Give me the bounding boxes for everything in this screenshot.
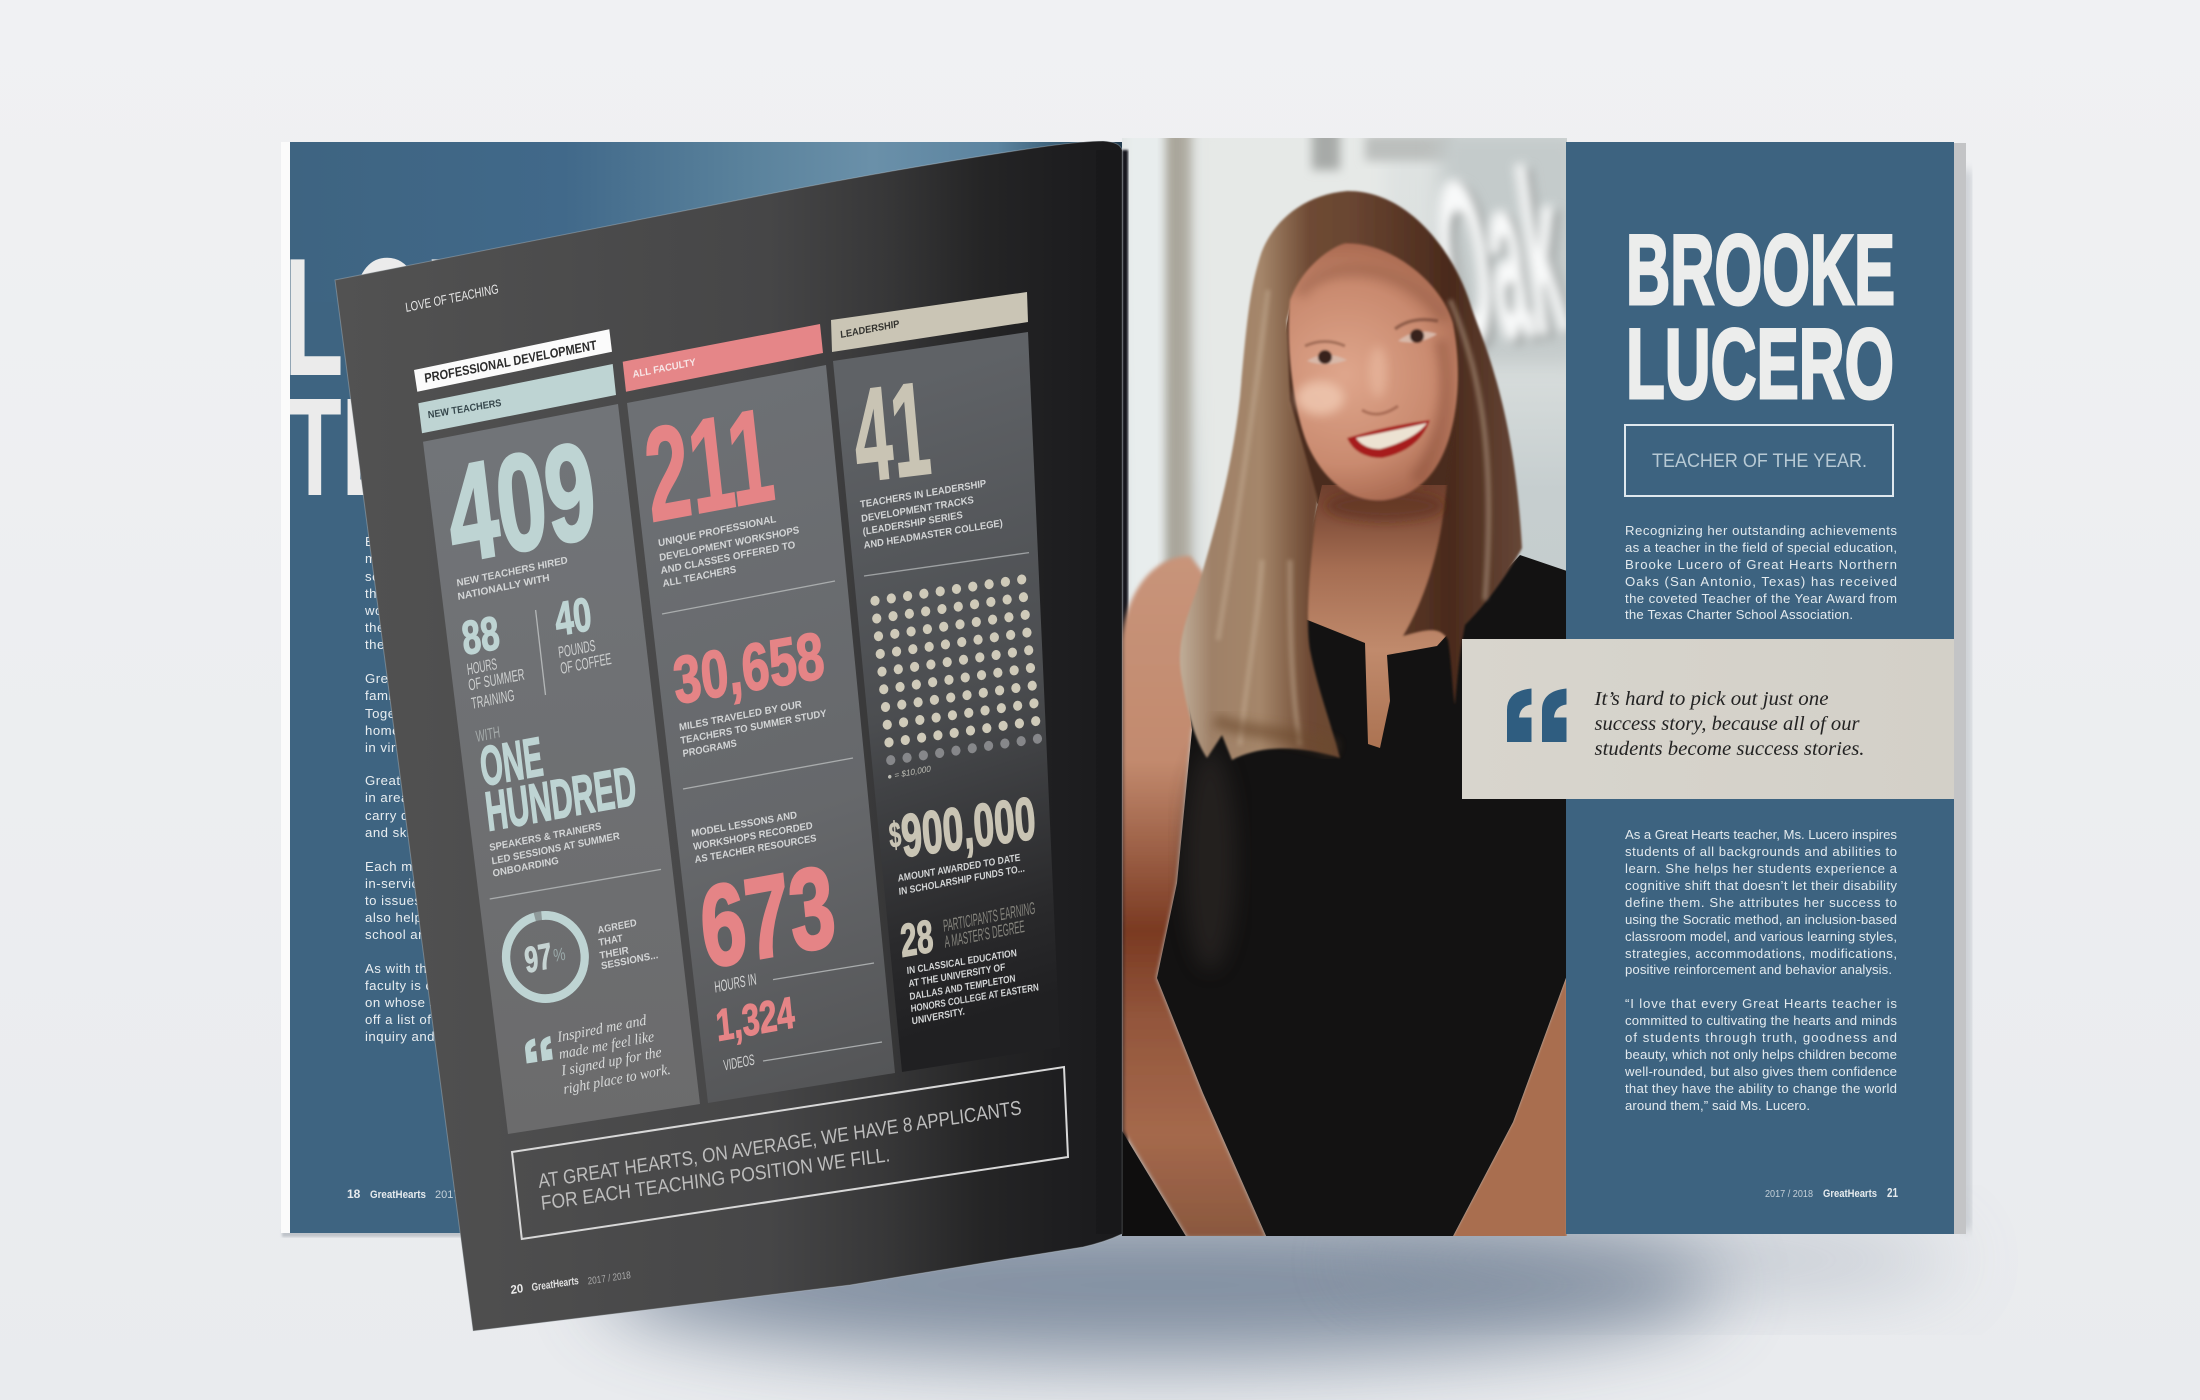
black dress [1157,555,1567,1238]
left page body text: faculty is o [365,978,433,993]
left page footer: 18 [347,1187,361,1201]
callout box: applicants [512,1067,1068,1239]
body paragraph one [1625,827,1898,977]
pull quote text: It’s hard to pick out just one [1593,688,1829,710]
stat: 30,658 miles [670,619,828,760]
stat: $900,000 scholarships: 900,000 [899,784,1038,870]
left page body text: home [365,723,400,738]
left page body text: the [365,620,385,635]
stat: 40 pounds of coffee [552,588,613,678]
stat: $900,000 scholarships: AMOUNT AWARDED TO DATE [897,853,1021,885]
stat: 40 pounds of coffee: OF COFFEE [559,650,613,678]
stat: 1,324 videos [714,988,882,1075]
stat: 88 hours of summer training: HOURS [466,655,498,679]
left page body text: Toge [365,706,396,721]
stat: $900,000 scholarships [887,784,1038,898]
chart: 97 percent ring: 97 [522,935,554,981]
stat: 30,658 miles: MILES TRAVELED BY OUR [679,699,803,734]
stat: 28 participants: HONORS COLLEGE AT EASTERN [910,982,1039,1015]
stat: 88 hours of summer training [459,607,525,713]
pull quote text: students become success stories. [1594,738,1864,760]
icon: small quotation marks [524,1036,553,1064]
stat: 409 new teachers: NATIONALLY WITH [457,573,550,603]
chart: 97 percent ring [502,912,588,1002]
left page body text: fami [365,688,392,703]
face [1289,243,1458,522]
page footer: 2017 / 2018 [587,1270,632,1287]
pull quote panel [1462,639,1954,799]
stat: 41 teachers in leadership: (LEADERSHIP SERIES [862,510,964,538]
right page footer [1765,1185,1898,1200]
stat: one hundred speakers: WITH [475,723,501,746]
stat: $900,000 scholarships: $ [887,813,903,856]
neck and chest [1306,485,1448,748]
stat: 409 new teachers: NEW TEACHERS HIRED [456,555,568,589]
testimonial: right place to work. [562,1061,671,1098]
stat: 28 participants: 28 [898,910,935,967]
callout box: applicants: AT GREAT HEARTS, ON AVERAGE, WE HAVE 8 APPLICANTS [537,1097,1022,1193]
testimonial: made me feel like [558,1028,655,1063]
stat: one hundred speakers [475,723,639,880]
left page body text: in area [365,790,409,805]
stat: 28 participants: A MASTER'S DEGREE [944,916,1025,952]
left page footer: 2017 / 2018 [435,1189,493,1201]
text: Oak [1422,122,1577,393]
left page body text: E [365,534,374,549]
stat: 41 teachers in leadership: 41 [847,355,936,511]
chart: dot grid of scholarship funds [875,579,1038,760]
long hair [1180,191,1522,760]
intro paragraph: the Texas Charter School Association. [1625,607,1853,622]
stat: one hundred speakers: SPEAKERS & TRAINERS [489,821,602,854]
pull quote text [1593,688,1864,760]
left arm [1122,556,1267,1238]
left page body text: school an [365,927,426,942]
stat: 211 workshops: ALL TEACHERS [662,564,737,590]
left page body text: also help [365,910,422,925]
pull quote text: success story, because all of our [1594,713,1860,735]
panel: curled dark infographic page [335,141,1122,1331]
column: leadership: PARTICIPANTS EARNING [942,898,1036,936]
left page body text: wo [364,603,383,618]
body paragraph one: positive reinforcement and behavior analysis. [1625,962,1892,977]
stat: 30,658 miles: 30,658 [670,619,828,719]
testimonial: Inspired me and [556,1012,648,1046]
left page footer [347,1187,493,1201]
left page heading [290,258,440,495]
left page body text: and ski [365,825,410,840]
hair behind head [1286,242,1458,504]
stat: one hundred speakers: ONBOARDING [492,856,559,880]
left page body text: carry d [365,808,409,823]
stat: $900,000 scholarships: IN SCHOLARSHIP FUNDS TO... [898,863,1025,898]
stat: 1,324 videos: VIDEOS [723,1052,755,1075]
column: leadership [831,292,1060,1072]
page footer [510,1270,632,1297]
body paragraph two: that they have the ability to change the world [1625,1081,1897,1096]
right page footer: 2017 / 2018 [1765,1188,1813,1200]
panel: left magazine page [281,142,1122,1233]
stat: 40 pounds of coffee: 40 [552,588,594,647]
icon: quotation marks [1507,688,1566,742]
subtitle box: teacher of the year: TEACHER OF THE YEAR. [1652,450,1867,472]
stat: 28 participants: IN CLASSICAL EDUCATION [906,948,1017,977]
stat: 673 hours of lessons: MODEL LESSONS AND [691,810,798,840]
stat: 41 teachers in leadership: TEACHERS IN LEADERSHIP [860,479,987,511]
intro paragraph: Brooke Lucero of Great Hearts Northern [1625,557,1897,572]
page footer: 20 [510,1281,524,1297]
callout box: applicants: FOR EACH TEACHING POSITION WE FILL. [540,1144,891,1215]
body paragraph two: beauty, which not only helps children become [1625,1047,1897,1062]
stat: 1,324 videos: 1,324 [714,988,797,1051]
column: new teachers: NEW TEACHERS [427,398,502,421]
body paragraph one: using the Socratic method, an inclusion-based [1625,912,1897,927]
stat: one hundred speakers: ONE [477,725,546,798]
name heading: LUCERO [1626,308,1894,419]
body paragraph one: learn. She helps her students experience a [1625,861,1898,876]
stat: 41 teachers in leadership: DEVELOPMENT TRACKS [861,495,975,525]
stat: 88 hours of summer training: OF SUMMER [467,666,525,695]
text: Oak [1428,126,1583,398]
left page heading: TEACHING [288,368,747,525]
intro paragraph: the coveted Teacher of the Year Award from [1625,591,1897,606]
left page body text: the [365,637,385,652]
stat: 211 workshops: UNIQUE PROFESSIONAL [658,514,777,549]
stat: 88 hours of summer training: TRAINING [470,687,515,713]
page footer: GreatHearts [531,1275,579,1294]
spine shading [1096,150,1122,1234]
stat: 28 participants: AT THE UNIVERSITY OF [908,962,1006,990]
stat: 88 hours of summer training: 88 [459,607,502,666]
left page body text: Gre [365,671,388,686]
stat: 673 hours of lessons: HOURS IN [714,970,757,997]
stat: 673 hours of lessons: 673 [695,842,840,993]
left page body text: As with th [365,961,427,976]
stat: 41 teachers in leadership: AND HEADMASTER COLLEGE) [863,518,1003,552]
ring caption: THAT [598,933,624,949]
left page body text: Great [365,773,400,788]
stat: 30,658 miles: TEACHERS TO SUMMER STUDY [680,708,827,747]
intro paragraph [1625,523,1897,622]
body paragraph one: As a Great Hearts teacher, Ms. Lucero inspires [1625,827,1897,842]
body paragraph two: committed to cultivating the hearts and minds [1625,1013,1897,1028]
stat: one hundred speakers: LED SESSIONS AT SUMMER [491,831,621,867]
body paragraph one: classroom model, and various learning styles, [1625,929,1897,944]
dot legend: ● = $10,000 [887,763,931,782]
body paragraph two: well-rounded, but also gives them confidence [1624,1064,1897,1079]
stat: one hundred speakers: HUNDRED [482,755,639,843]
ring caption: THEIR [599,945,630,962]
stat: 673 hours of lessons: WORKSHOPS RECORDED [693,821,813,853]
left page body text: to issues [365,893,422,908]
photo: Brooke Lucero portrait [1122,120,1583,1240]
left page footer: GreatHearts [370,1189,426,1201]
subtitle box: teacher of the year [1625,425,1893,496]
body paragraph one: students of all backgrounds and abilities to [1625,844,1897,859]
panel: right blue page [1462,142,1966,1234]
ring caption [597,918,659,972]
ring caption: AGREED [597,918,637,936]
left page body text: sc [365,569,379,584]
left page body text: off a list of [365,1012,431,1027]
intro paragraph: Oaks (San Antonio, Texas) has received [1625,574,1897,589]
column: leadership: LEADERSHIP [840,319,900,341]
name heading [1626,214,1895,419]
body paragraph one: strategies, accommodations, modifications, [1625,946,1897,961]
stat: 409 new teachers: 409 [439,413,604,593]
stat: 211 workshops: AND CLASSES OFFERED TO [660,540,796,577]
stat: 28 participants: DALLAS AND TEMPLETON [909,974,1016,1003]
intro paragraph: as a teacher in the field of special education, [1625,540,1897,555]
book shadow [282,170,1970,1360]
right page footer: 21 [1887,1185,1898,1200]
page label: LOVE OF TEACHING [404,281,499,315]
body paragraph two: of students through truth, goodness and [1625,1030,1897,1045]
left page body text: m [365,551,376,566]
body paragraph two: “I love that every Great Hearts teacher is [1625,996,1897,1011]
body paragraph one: define them. She attributes her success to [1625,895,1897,910]
left page body text: Each me [365,859,421,874]
right page footer: GreatHearts [1823,1188,1877,1200]
intro paragraph: Recognizing her outstanding achievements [1625,523,1897,538]
right arm [1452,975,1567,1238]
dark corner below arm [1122,1131,1187,1238]
body paragraph one: cognitive shift that doesn’t let their disability [1625,878,1897,893]
stat: 211 workshops: DEVELOPMENT WORKSHOPS [659,525,800,564]
stat: 673 hours of lessons: AS TEACHER RESOURCES [694,833,817,866]
chart: 97 percent ring: % [552,943,566,966]
left page body text: in virt [365,740,400,755]
stat: 28 participants: UNIVERSITY. [911,1006,965,1027]
header: professional development: PROFESSIONAL DEVELOPMENT [424,337,597,386]
stat: 30,658 miles: PROGRAMS [682,738,738,760]
left page body text [364,534,437,1044]
stat: 28 participants [898,898,1039,1027]
column: all faculty [623,324,895,1103]
stat: 40 pounds of coffee: POUNDS [557,637,597,662]
left page body text: inquiry and [365,1029,435,1044]
stat: 211 workshops: 211 [638,380,780,551]
testimonial [556,1012,671,1098]
testimonial: I signed up for the [560,1044,663,1080]
stat: 211 workshops [638,380,800,590]
body paragraph two [1624,996,1897,1113]
column: new teachers [418,364,700,1134]
column: all faculty: ALL FACULTY [632,357,697,381]
ring caption: SESSIONS... [601,950,659,972]
left page body text: in-servic [365,876,419,891]
name heading: BROOKE [1626,214,1895,325]
left page body text: th [365,586,377,601]
stat: 409 new teachers [439,413,604,603]
left page heading: LOVE OF [284,225,752,412]
left page body text: on whose s [365,995,437,1010]
body paragraph two: around them,” said Ms. Lucero. [1625,1098,1810,1113]
